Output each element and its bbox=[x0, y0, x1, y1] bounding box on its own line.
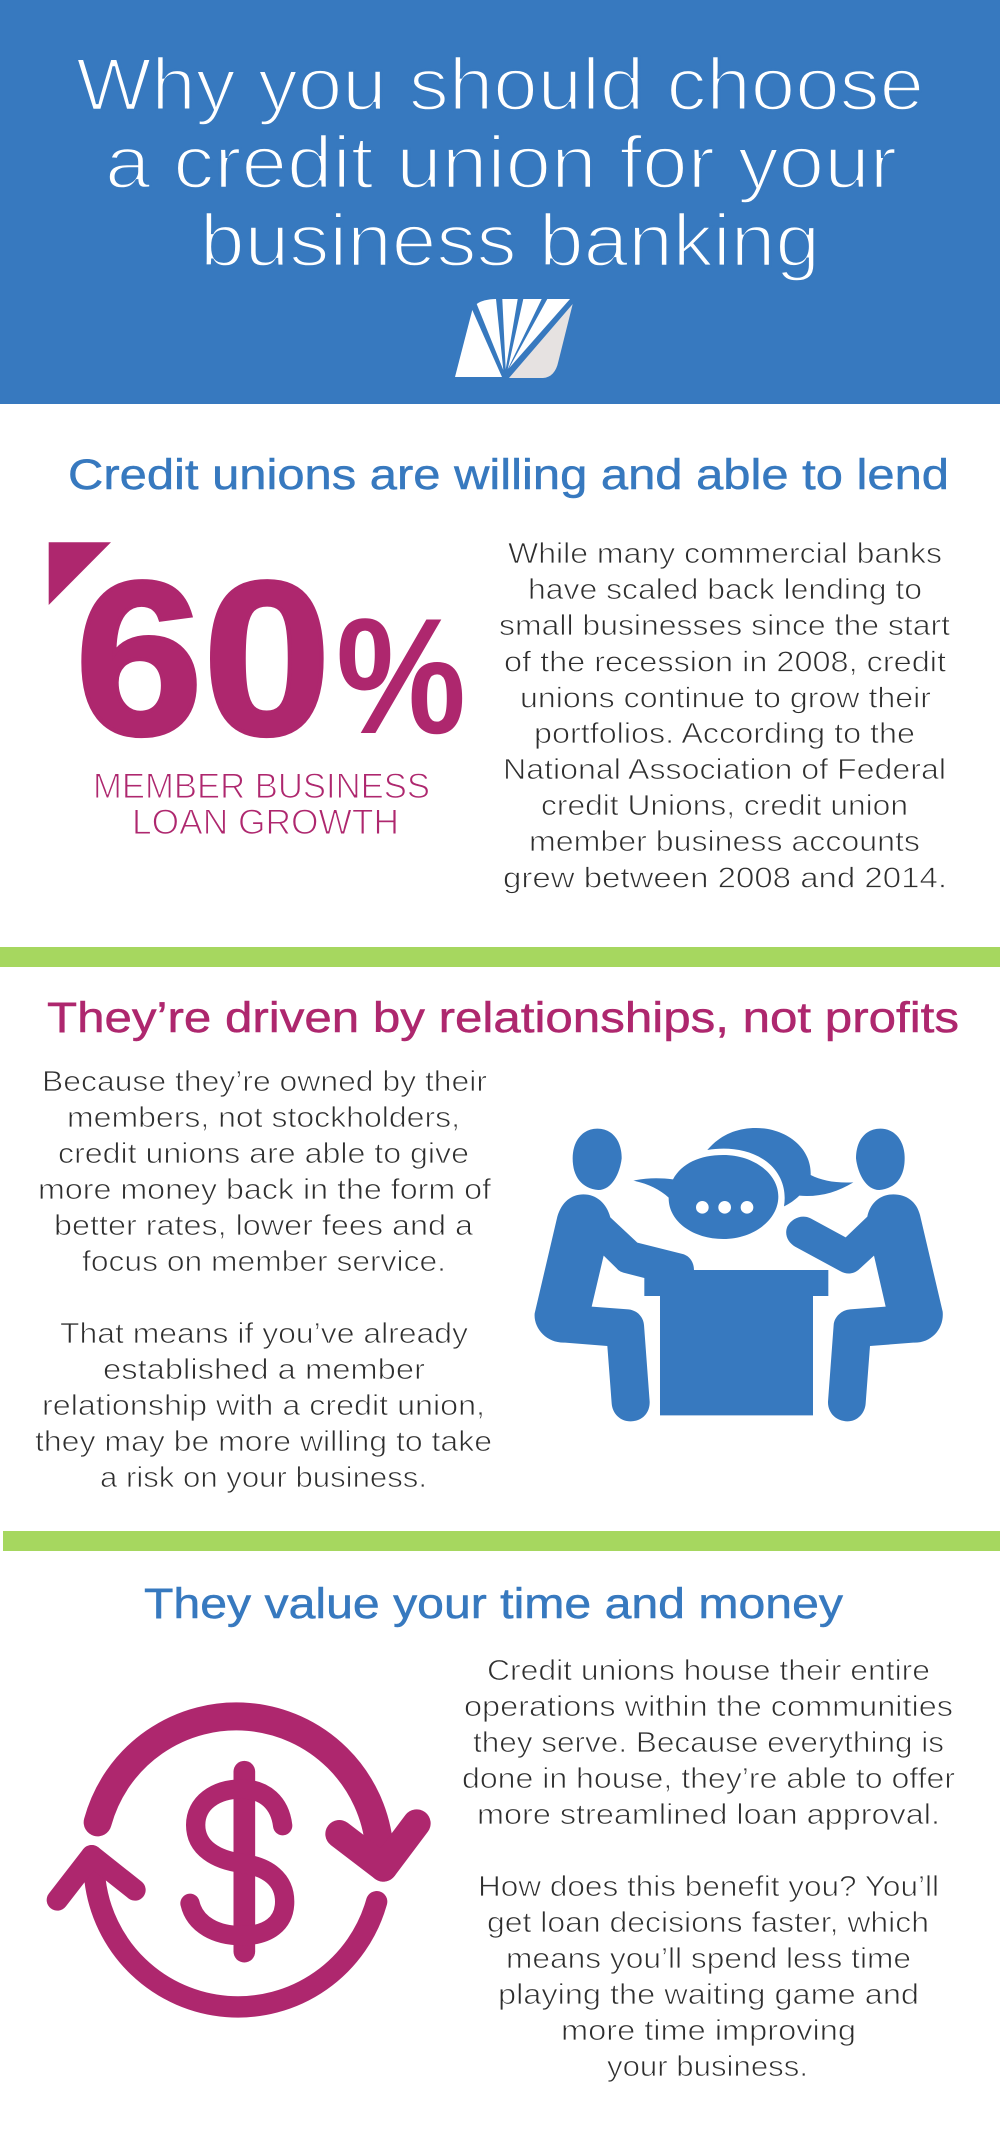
text block: time and money: more streamlined loan approval. bbox=[477, 1799, 940, 1831]
text block: lending: grew between 2008 and 2014. bbox=[503, 862, 947, 894]
text block: time and money: they serve. Because everything is bbox=[473, 1727, 944, 1759]
text block: time and money: Credit unions house their entire bbox=[487, 1655, 930, 1687]
title bbox=[76, 43, 924, 282]
text block: time and money: playing the waiting game and bbox=[498, 1979, 919, 2011]
text block: relationships: better rates, lower fees and a bbox=[54, 1210, 474, 1242]
text block: lending: portfolios. According to the bbox=[534, 718, 915, 750]
text block: time and money: get loan decisions faster, which bbox=[487, 1907, 929, 1939]
panel: 60 percent statistic bbox=[49, 537, 466, 842]
stat label: LOAN GROWTH bbox=[132, 803, 399, 842]
text block: time and money bbox=[462, 1655, 955, 2083]
text block: lending: member business accounts bbox=[529, 826, 920, 858]
title: business banking bbox=[200, 199, 820, 282]
heading: relationships: They’re driven by relationships, not profits bbox=[47, 994, 959, 1042]
heading: willing and able to lend: Credit unions are willing and able to lend bbox=[68, 451, 949, 499]
icon: corner triangle bbox=[49, 542, 111, 605]
text block: lending: of the recession in 2008, credit bbox=[504, 646, 946, 678]
text block: time and money: your business. bbox=[607, 2051, 808, 2083]
stat label: MEMBER BUSINESS bbox=[93, 767, 430, 806]
stat label bbox=[93, 767, 430, 842]
text block: time and money: more time improving bbox=[561, 2015, 856, 2047]
text block: lending bbox=[499, 538, 950, 894]
icon: dollar with circular arrows bbox=[57, 1716, 417, 2007]
text block: relationships: established a member bbox=[103, 1354, 425, 1386]
percent sign: % bbox=[336, 584, 466, 768]
icon: two people meeting at a table bbox=[535, 1128, 943, 1421]
title: a credit union for your bbox=[105, 121, 897, 204]
text block: lending: unions continue to grow their bbox=[520, 682, 931, 714]
big number: 60 bbox=[75, 537, 331, 781]
text block: time and money: done in house, they’re able to offer bbox=[462, 1763, 955, 1795]
text block: time and money: means you’ll spend less time bbox=[506, 1943, 911, 1975]
text block: lending: National Association of Federal bbox=[503, 754, 946, 786]
text block: relationships: focus on member service. bbox=[82, 1246, 446, 1278]
text block: relationships: they may be more willing to take bbox=[35, 1426, 492, 1458]
green divider bbox=[3, 1531, 1000, 1551]
text block: lending: small businesses since the start bbox=[499, 610, 950, 642]
text block: relationships: a risk on your business. bbox=[100, 1462, 427, 1494]
text block: time and money: How does this benefit you? You’ll bbox=[478, 1871, 939, 1903]
green divider bbox=[0, 947, 1000, 967]
text block: relationships bbox=[35, 1066, 492, 1494]
text block: relationships: credit unions are able to give bbox=[58, 1138, 469, 1170]
text block: relationships: more money back in the form of bbox=[38, 1174, 492, 1206]
text block: lending: have scaled back lending to bbox=[528, 574, 922, 606]
text block: relationships: members, not stockholders, bbox=[67, 1102, 460, 1134]
heading: time and money: They value your time and money bbox=[144, 1580, 844, 1628]
text block: lending: credit Unions, credit union bbox=[541, 790, 908, 822]
title: Why you should choose bbox=[76, 43, 924, 126]
text block: relationships: relationship with a credit union, bbox=[42, 1390, 485, 1422]
icon: credit union logo bbox=[455, 299, 573, 378]
panel: header bbox=[0, 0, 1000, 404]
text block: relationships: That means if you’ve already bbox=[60, 1318, 469, 1350]
text block: lending: While many commercial banks bbox=[508, 538, 942, 570]
text block: time and money: operations within the communities bbox=[464, 1691, 953, 1723]
text block: relationships: Because they’re owned by their bbox=[42, 1066, 487, 1098]
